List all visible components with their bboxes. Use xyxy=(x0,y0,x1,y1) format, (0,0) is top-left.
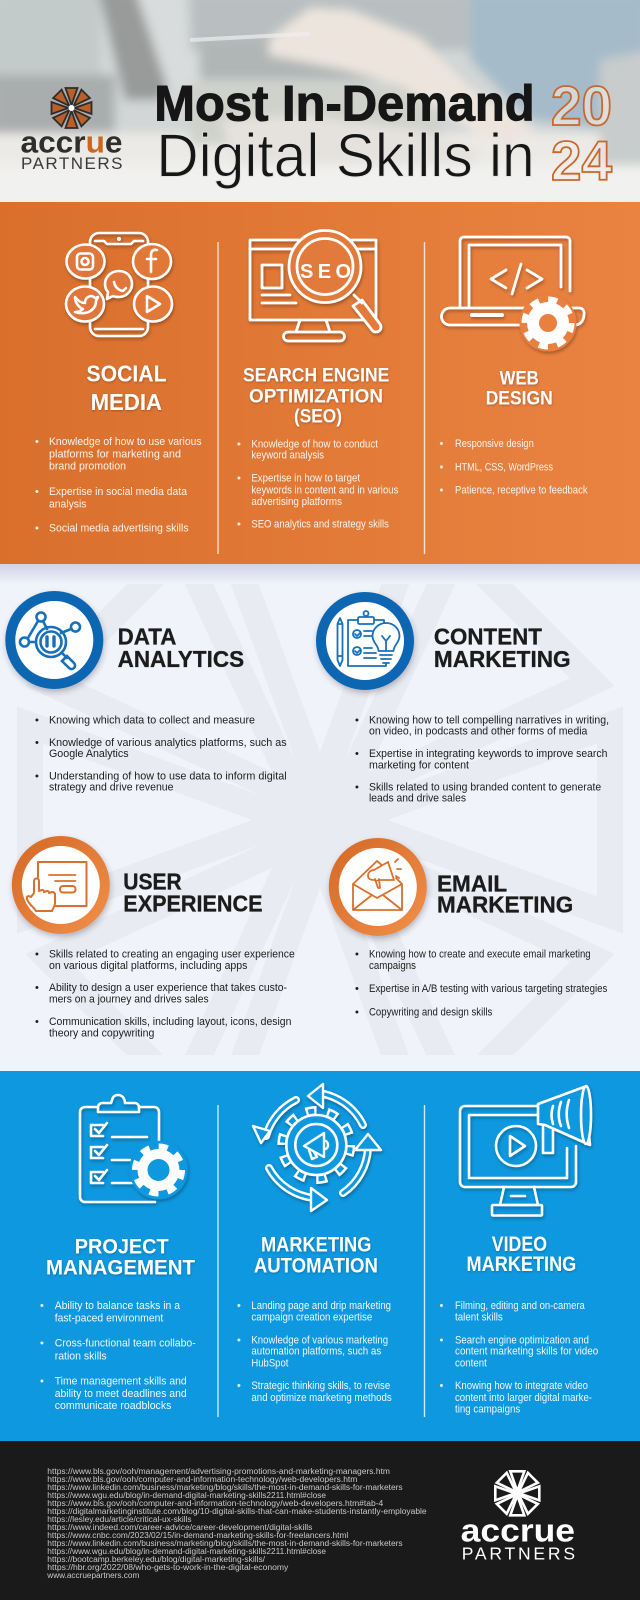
bullet list: content marketing: • xyxy=(355,781,359,793)
bullet list: seo: Knowledge of how to conduct xyxy=(251,438,378,450)
heading: data analytics xyxy=(118,623,244,672)
bullet list: content marketing: • xyxy=(355,748,359,760)
bullet list: data analytics: • xyxy=(35,737,39,749)
icon: marketing automation xyxy=(253,1084,381,1211)
source list: https://digitalmarketinginstitute.com/blog/10-digital-skills-that-can-make-students-instantly-employable xyxy=(47,1507,427,1516)
heading: project management: PROJECT xyxy=(75,1235,169,1258)
source list: www.accruepartners.com xyxy=(46,1571,140,1580)
bullet list: video marketing: content into larger digital marke- xyxy=(455,1392,592,1404)
source list: https://www.wgu.edu/blog/in-demand-digital-marketing-skills2211.html#close xyxy=(47,1491,327,1500)
bullet list: email marketing: campaigns xyxy=(369,960,416,972)
heading: user experience: USER xyxy=(123,868,182,894)
bullet list: web design: • xyxy=(440,485,444,497)
title: Most In-Demand xyxy=(154,76,535,132)
bullet list: video marketing: content marketing skills for video xyxy=(455,1346,598,1358)
bullet list: seo: • xyxy=(237,438,241,450)
heading: video marketing xyxy=(466,1233,576,1276)
source list: https://bootcamp.berkeley.edu/blog/digital-marketing-skills/ xyxy=(47,1555,266,1564)
heading: content marketing: CONTENT xyxy=(434,623,543,649)
bullet list: web design: • xyxy=(440,438,444,450)
bullet list: social media: • xyxy=(35,486,39,498)
bullet list: data analytics: • xyxy=(35,714,39,726)
bullet list: seo: SEO analytics and strategy skills xyxy=(251,519,389,531)
bullet list: project management xyxy=(40,1300,196,1412)
source list: https://www.cnbc.com/2023/02/15/in-demand-marketing-skills-for-freelancers.html xyxy=(47,1531,349,1540)
bullet list: video marketing xyxy=(440,1300,598,1415)
heading: social media: SOCIAL xyxy=(86,361,166,387)
bullet list: content marketing: marketing for content xyxy=(369,759,469,771)
panel: footer xyxy=(0,1441,640,1600)
bullet list: video marketing: talent skills xyxy=(455,1311,503,1323)
bullet list: email marketing: Expertise in A/B testing with various targeting strategies xyxy=(369,983,608,995)
panel: orange skills xyxy=(0,202,640,564)
bullet list: web design: HTML, CSS, WordPress xyxy=(455,461,553,473)
header photo background xyxy=(0,0,640,213)
bullet list: user experience: • xyxy=(35,982,39,994)
bullet list: email marketing xyxy=(355,949,608,1018)
icon: seo magnifier monitor: SEO xyxy=(300,261,351,283)
heading: project management: MANAGEMENT xyxy=(46,1257,195,1280)
bullet list: data analytics: Google Analytics xyxy=(49,748,129,760)
bullet list: marketing automation: and optimize marketing methods xyxy=(251,1392,392,1404)
bullet list: video marketing: Search engine optimization and xyxy=(455,1334,589,1346)
panel: blue skills xyxy=(0,1071,640,1441)
icon: content marketing xyxy=(321,597,409,685)
bullet list: email marketing: • xyxy=(355,1006,359,1018)
bullet list: user experience: Communication skills, including layout, icons, design xyxy=(49,1016,291,1028)
bullet list: marketing automation: Knowledge of various marketing xyxy=(251,1334,388,1346)
bullet list: web design: Patience, receptive to feedback xyxy=(455,485,588,497)
source list: https://www.wgu.edu/blog/in-demand-digital-marketing-skills2211.html#close xyxy=(47,1547,327,1556)
bullet list: content marketing: on video, in podcasts and other forms of media xyxy=(369,726,588,738)
bullet list: seo: keyword analysis xyxy=(251,450,324,462)
heading: email marketing xyxy=(437,870,573,918)
source list xyxy=(46,1467,427,1580)
bullet list: project management: • xyxy=(40,1375,44,1387)
bullet list: video marketing: • xyxy=(440,1334,444,1346)
bullet list: content marketing: Skills related to using branded content to generate xyxy=(369,781,601,793)
bullet list: social media: brand promotion xyxy=(49,460,126,472)
bullet list: project management: Time management skills and xyxy=(55,1375,187,1387)
bullet list: video marketing: Knowing how to integrate video xyxy=(455,1380,588,1392)
title: Digital Skills in xyxy=(156,122,535,190)
heading: web design xyxy=(486,368,553,410)
icon: web design laptop gear xyxy=(442,237,584,350)
bullet list: web design: • xyxy=(440,461,444,473)
bullet list: user experience: theory and copywriting xyxy=(49,1027,154,1039)
bullet list: marketing automation: HubSpot xyxy=(251,1358,288,1370)
logo: accrue partners header: PARTNERS xyxy=(21,154,122,173)
heading: project management xyxy=(46,1235,195,1280)
bullet list: project management: Ability to balance tasks in a xyxy=(55,1300,181,1312)
bullet list: marketing automation: • xyxy=(237,1300,241,1312)
bullet list: user experience xyxy=(35,949,295,1039)
bullet list: web design xyxy=(440,438,588,497)
bullet list: content marketing: Expertise in integrating keywords to improve search xyxy=(369,748,607,760)
source list: https://www.linkedin.com/business/marketing/blog/skills/the-most-in-demand-skills-for-marketers xyxy=(47,1483,403,1492)
bullet list: user experience: • xyxy=(35,949,39,961)
heading: social media xyxy=(86,361,166,415)
bullet list: data analytics: • xyxy=(35,770,39,782)
title xyxy=(154,74,612,192)
heading: data analytics: ANALYTICS xyxy=(118,646,244,672)
bullet list: social media xyxy=(35,436,202,535)
bullet list: social media: Social media advertising skills xyxy=(49,523,189,535)
icon: project management xyxy=(80,1095,186,1202)
heading: data analytics: DATA xyxy=(118,623,176,649)
bullet list: marketing automation: • xyxy=(237,1334,241,1346)
heading: web design: DESIGN xyxy=(486,388,553,410)
bullet list: social media: • xyxy=(35,436,39,448)
bullet list: video marketing: content xyxy=(455,1358,487,1370)
heading: email marketing: MARKETING xyxy=(437,892,573,918)
bullet list: user experience: Ability to design a user experience that takes custo- xyxy=(49,982,287,994)
heading: social media: MEDIA xyxy=(91,389,162,415)
source list: https://www.bls.gov/ooh/computer-and-information-technology/web-developers.htm#tab-4 xyxy=(47,1499,384,1508)
bullet list: data analytics: strategy and drive revenue xyxy=(49,782,174,794)
bullet list: content marketing: • xyxy=(355,714,359,726)
bullet list: seo: Expertise in how to target xyxy=(251,473,360,485)
heading: video marketing: VIDEO xyxy=(492,1233,547,1256)
logo: accrue partners header: accrue xyxy=(20,125,122,160)
source list: https://hbr.org/2022/08/who-gets-to-work-in-the-digital-economy xyxy=(47,1563,288,1572)
bullet list: user experience: on various digital platforms, including apps xyxy=(49,960,248,972)
bullet list: video marketing: • xyxy=(440,1300,444,1312)
heading: user experience xyxy=(123,868,262,916)
bullet list: social media: • xyxy=(35,523,39,535)
bullet list: video marketing: • xyxy=(440,1380,444,1392)
heading: marketing automation: AUTOMATION xyxy=(254,1254,378,1277)
bullet list: marketing automation: • xyxy=(237,1380,241,1392)
bullet list: content marketing: Knowing how to tell compelling narratives in writing, xyxy=(369,714,609,726)
heading: marketing automation xyxy=(254,1233,378,1277)
bullet list: social media: Knowledge of how to use various xyxy=(49,436,202,448)
bullet list: email marketing: • xyxy=(355,983,359,995)
bullet list: data analytics: Understanding of how to use data to inform digital xyxy=(49,770,287,782)
source list: https://www.linkedin.com/business/marketing/blog/skills/the-most-in-demand-skills-for-marketers xyxy=(47,1539,403,1548)
logo: accrue partners footer xyxy=(461,1471,575,1563)
heading: email marketing: EMAIL xyxy=(437,870,507,896)
bullet list: user experience: mers on a journey and drives sales xyxy=(49,993,209,1005)
bullet list: seo: advertising platforms xyxy=(251,496,342,508)
bullet list: email marketing: Copywriting and design skills xyxy=(369,1006,493,1018)
source list: https://www.indeed.com/career-advice/career-development/digital-skills xyxy=(47,1523,312,1532)
heading: content marketing xyxy=(434,623,571,672)
heading: seo: SEARCH ENGINE xyxy=(243,366,389,387)
icon: footer star xyxy=(495,1471,539,1515)
bullet list: seo: • xyxy=(237,473,241,485)
bullet list: web design: Responsive design xyxy=(455,438,534,450)
icon: user experience xyxy=(17,841,105,929)
heading: marketing automation: MARKETING xyxy=(261,1233,371,1256)
logo: accrue partners footer: PARTNERS xyxy=(462,1543,575,1563)
source list: https://lesley.edu/article/critical-ux-skills xyxy=(47,1515,192,1524)
heading: seo: (SEO) xyxy=(294,406,342,427)
bullet list: video marketing: Filming, editing and on-camera xyxy=(455,1300,586,1312)
bullet list: email marketing: Knowing how to create and execute email marketing xyxy=(369,949,591,961)
bullet list: social media: Expertise in social media data xyxy=(49,486,188,498)
logo: accrue partners header xyxy=(20,88,122,173)
icon: social media phone xyxy=(66,233,172,336)
heading: video marketing: MARKETING xyxy=(466,1253,576,1276)
watermark star xyxy=(263,762,375,878)
heading: content marketing: MARKETING xyxy=(434,646,571,672)
logo: accrue partners footer: accrue xyxy=(461,1513,575,1549)
bullet list: data analytics xyxy=(35,714,287,794)
icon: email marketing xyxy=(334,843,422,931)
panel: light skills xyxy=(0,564,640,1071)
icon: data analytics xyxy=(10,596,98,684)
bullet list: project management: • xyxy=(40,1300,44,1312)
bullet list: project management: ability to meet deadlines and xyxy=(55,1388,187,1400)
bullet list: marketing automation: automation platforms, such as xyxy=(251,1346,382,1358)
source list: https://www.bls.gov/ooh/management/advertising-promotions-and-marketing-managers.htm xyxy=(47,1467,390,1476)
icon: accrue star xyxy=(52,88,92,128)
bullet list: project management: Cross-functional team collabo- xyxy=(55,1338,196,1350)
bullet list: video marketing: ting campaigns xyxy=(455,1403,521,1415)
bullet list: project management: • xyxy=(40,1338,44,1350)
bullet list: marketing automation: Strategic thinking skills, to revise xyxy=(251,1380,390,1392)
bullet list: project management: fast-paced environment xyxy=(55,1313,163,1325)
bullet list: user experience: Skills related to creating an engaging user experience xyxy=(49,949,295,961)
bullet list: content marketing: leads and drive sales xyxy=(369,793,466,805)
bullet list: email marketing: • xyxy=(355,949,359,961)
source list: https://www.bls.gov/ooh/computer-and-information-technology/web-developers.htm xyxy=(47,1475,358,1484)
bullet list: marketing automation: campaign creation expertise xyxy=(251,1311,372,1323)
bullet list: project management: communicate roadblocks xyxy=(55,1400,172,1412)
bullet list: seo: • xyxy=(237,519,241,531)
bullet list: data analytics: Knowing which data to collect and measure xyxy=(49,714,255,726)
bullet list: project management: ration skills xyxy=(55,1350,107,1362)
bullet list: marketing automation: Landing page and drip marketing xyxy=(251,1300,391,1312)
heading: seo: OPTIMIZATION xyxy=(249,386,383,407)
icon: video marketing xyxy=(460,1086,591,1216)
bullet list: seo: keywords in content and in various xyxy=(251,485,399,497)
bullet list: user experience: • xyxy=(35,1016,39,1028)
bullet list: social media: platforms for marketing and xyxy=(49,448,181,460)
icon: seo magnifier monitor xyxy=(250,230,381,341)
bullet list: seo xyxy=(237,438,399,531)
title: 24 xyxy=(551,129,612,192)
heading: seo xyxy=(243,366,389,427)
title: 20 xyxy=(551,74,612,137)
bullet list: marketing automation xyxy=(237,1300,392,1404)
bullet list: social media: analysis xyxy=(49,498,87,510)
bullet list: content marketing xyxy=(355,714,609,805)
bullet list: data analytics: Knowledge of various analytics platforms, such as xyxy=(49,737,287,749)
heading: web design: WEB xyxy=(500,368,539,390)
heading: user experience: EXPERIENCE xyxy=(123,890,262,916)
